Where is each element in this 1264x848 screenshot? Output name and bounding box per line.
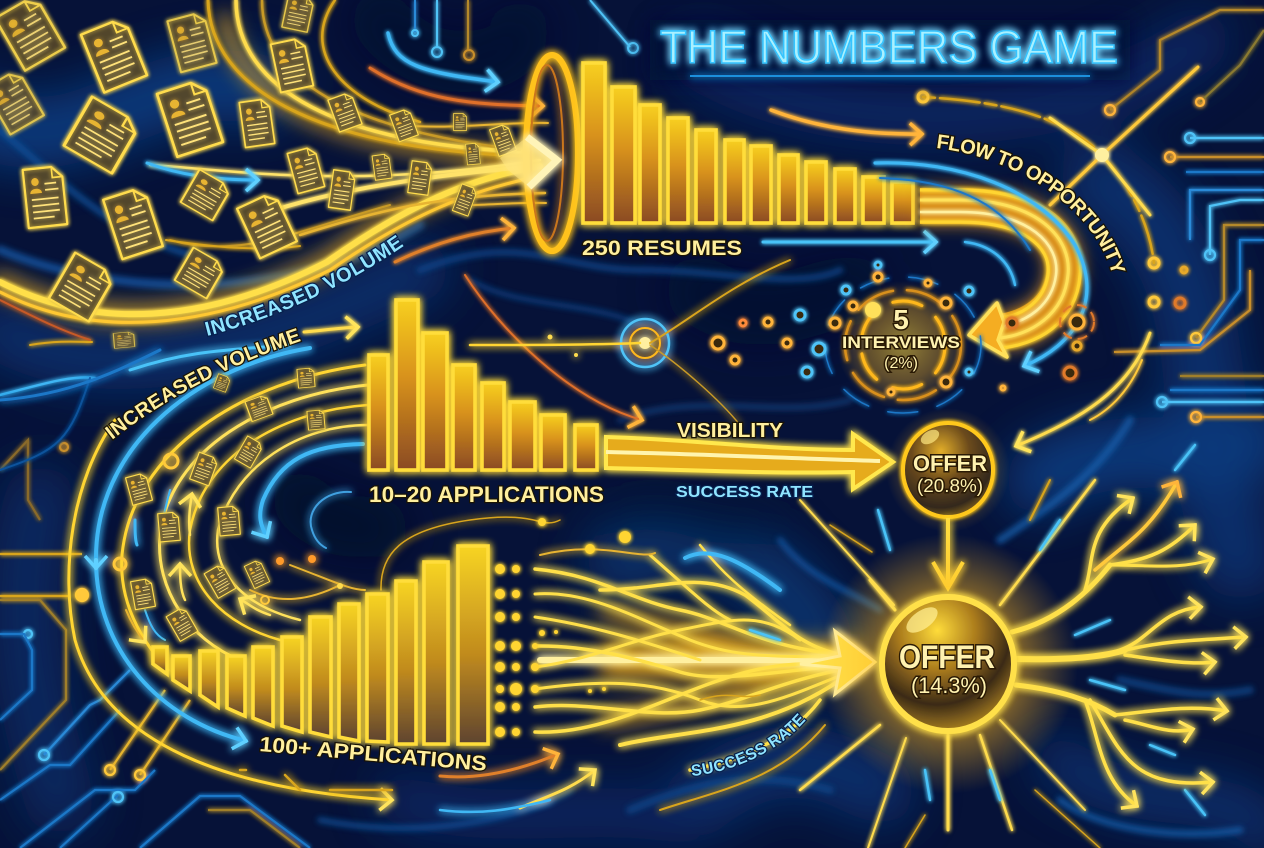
- circuit traces: right side: [1105, 10, 1264, 422]
- radiating rays: [800, 480, 1100, 848]
- text: 5 interviews (2%): [842, 304, 960, 372]
- interviews swirl: [712, 262, 1094, 413]
- orange arrow lower: [395, 228, 514, 262]
- blue arrow upper: [388, 33, 498, 82]
- offer 20.8% circle: OFFER: [913, 451, 987, 476]
- label: increased volume yellow: INCREASED VOLUME: [103, 326, 302, 441]
- left S-curve arcs: [0, 332, 560, 800]
- offer 20.8% circle: [886, 408, 1010, 532]
- label: success rate upper: SUCCESS RATE: [676, 484, 813, 501]
- offer 14.3% burst: (14.3%): [911, 673, 987, 698]
- big arrow head into funnel: [500, 137, 557, 187]
- blue inner arcs: [260, 444, 363, 537]
- label: flow to opportunity: FLOW TO OPPORTUNITY: [936, 133, 1128, 272]
- text: 5 interviews (2%): INTERVIEWS: [842, 333, 960, 352]
- fan-out branches from bars to offer: [240, 545, 875, 812]
- title: THE NUMBERS GAME: [660, 21, 1118, 73]
- bar chart: 100+ applications: [153, 546, 488, 744]
- yellow arrow after volume: [304, 327, 358, 332]
- orange arrow top right: [771, 110, 922, 134]
- offer 14.3% orb: [882, 597, 1014, 731]
- orange arrow upper: [370, 68, 543, 106]
- resume documents: [0, 0, 516, 321]
- offer 14.3% burst: [750, 445, 1246, 848]
- cyan flecks: [750, 445, 1205, 815]
- opportunity arc and star: [918, 67, 1198, 446]
- offer 14.3% burst: OFFER: [899, 639, 995, 675]
- blue arrow under resumes: [763, 240, 936, 244]
- yellow outer arc: [69, 420, 392, 800]
- curved arrow to interviews: [875, 163, 1087, 366]
- funnel ring: [526, 55, 578, 251]
- orbit nodes: [712, 262, 1094, 395]
- right branching arrows: [1012, 482, 1246, 806]
- accent arrows near funnel: [0, 33, 936, 470]
- bar chart: 250 resumes: [583, 63, 913, 223]
- big arrow to offer 20.8%: [606, 434, 893, 489]
- text: 5 interviews (2%): (2%): [884, 355, 918, 372]
- blue arrow left: [147, 163, 258, 180]
- arrow between offers: [933, 518, 963, 588]
- circuit traces: left side: [0, 440, 310, 848]
- outer blue arc arrow: [875, 163, 1087, 366]
- label: 100+ applications: 100+ APPLICATIONS: [259, 733, 488, 776]
- glowing node and line: [470, 260, 790, 425]
- circuit traces: top centre: [412, 0, 638, 60]
- small application documents: [113, 332, 325, 641]
- flow arcs into funnel: [0, 0, 548, 322]
- text: 5 interviews (2%): 5: [893, 304, 909, 335]
- offer 20.8% circle: (20.8%): [917, 476, 983, 496]
- blue arc: [96, 348, 310, 741]
- label: increased volume blue: INCREASED VOLUME: [203, 233, 404, 337]
- up arrows: [189, 494, 192, 535]
- bar chart: 10-20 applications: [369, 300, 597, 470]
- label: 10-20 applications: 10–20 APPLICATIONS: [369, 482, 604, 507]
- label: 250 resumes: 250 RESUMES: [582, 237, 742, 260]
- label: visibility: VISIBILITY: [677, 420, 784, 442]
- label: success rate lower: SUCCESS RATE: [690, 712, 808, 777]
- fan-out dots: [495, 518, 631, 737]
